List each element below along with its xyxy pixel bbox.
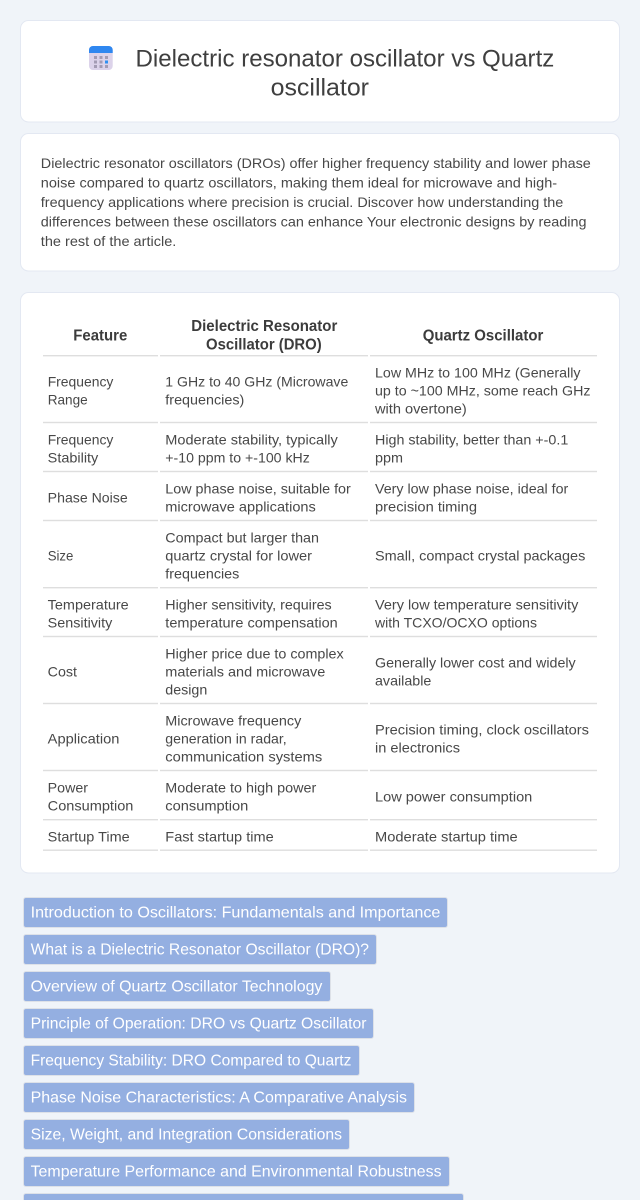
table row: temperature sensitivity: with TCXO/OCXO options [374, 614, 537, 630]
table row: size: quartz crystal for lower [165, 547, 312, 563]
topic button: quartz overview: Overview of Quartz Oscillator Technology [31, 979, 322, 996]
topic button: frequency stability: Frequency Stability: DRO Compared to Quartz [31, 1053, 351, 1070]
table row: startup time [43, 828, 597, 851]
table row: temperature sensitivity [43, 596, 597, 637]
table header [43, 318, 597, 356]
table row: frequency range: Range [48, 391, 88, 407]
table row: frequency range: Frequency [48, 373, 113, 389]
table row: application [43, 712, 597, 771]
panel: comparison table [20, 292, 620, 873]
table row: phase noise: Low phase noise, suitable for [165, 480, 351, 496]
title [136, 46, 554, 102]
table row: frequency range: 1 GHz to 40 GHz (Microwave [165, 373, 349, 389]
topic button: frequency stability [24, 1046, 360, 1076]
text block: introduction paragraph: the rest of the article. [41, 233, 176, 249]
table row: cost: design [165, 681, 207, 697]
table row: application: communication systems [165, 748, 322, 764]
table row: size: Small, compact crystal packages [375, 547, 585, 563]
table row: frequency stability [43, 432, 597, 472]
table row: cost: materials and microwave [165, 663, 326, 679]
table row: temperature sensitivity: Higher sensitivity, requires [165, 596, 332, 612]
table row: frequency stability: +-10 ppm to +-100 kHz [165, 450, 310, 466]
topic button: principle of operation [24, 1008, 374, 1038]
table header: Oscillator (DRO) [206, 336, 322, 354]
table row: application: in electronics [375, 739, 460, 755]
table row: cost: available [375, 673, 432, 689]
table row: startup time: Fast startup time [165, 828, 274, 844]
table row: power consumption: Power [48, 779, 88, 795]
table row: size: frequencies [165, 565, 239, 581]
topic button: introduction: Introduction to Oscillators: Fundamentals and Importance [31, 905, 440, 922]
table row: size: Compact but larger than [165, 529, 319, 545]
table row: frequency range [43, 364, 597, 423]
table row: power consumption: Low power consumption [375, 788, 532, 804]
topic button: phase noise [24, 1082, 414, 1112]
table row: frequency range: up to ~100 MHz, some reach GHz [375, 382, 590, 398]
table row: startup time: Moderate startup time [375, 828, 518, 844]
topic button: size and weight [24, 1120, 350, 1150]
table row: phase noise: Very low phase noise, ideal for [375, 480, 569, 496]
table row: frequency range: with overtone) [374, 400, 467, 416]
topic button: what is a DRO: What is a Dielectric Resonator Oscillator (DRO)? [31, 942, 369, 959]
table row: phase noise: Phase Noise [48, 489, 128, 505]
table row: power consumption [43, 779, 597, 820]
table row: phase noise: precision timing [375, 498, 477, 514]
table row: frequency stability: Moderate stability, typically [165, 432, 338, 448]
table header: Dielectric Resonator [191, 318, 337, 335]
table row: frequency stability: High stability, better than +-0.1 [375, 432, 569, 448]
table row: phase noise: microwave applications [165, 498, 316, 514]
table row: power consumption: consumption [165, 797, 248, 813]
table row: startup time: Startup Time [48, 828, 130, 844]
table row: temperature sensitivity: Very low temperature sensitivity [375, 596, 578, 612]
topic button: what is a DRO [24, 934, 376, 964]
topic button: phase noise: Phase Noise Characteristics: A Comparative Analysis [31, 1090, 407, 1107]
table row: size: Size [48, 547, 74, 563]
table header: Feature [73, 328, 127, 345]
topic button: temperature performance: Temperature Performance and Environmental Robustness [31, 1164, 442, 1181]
table row: frequency range: frequencies) [165, 391, 244, 407]
table row: temperature sensitivity: temperature compensation [165, 614, 338, 630]
table row: cost: Cost [48, 663, 77, 679]
title: oscillator [271, 74, 369, 102]
topic button: quartz overview [24, 972, 330, 1002]
table row: application: generation in radar, [165, 730, 287, 746]
table row: frequency range: Low MHz to 100 MHz (Generally [375, 364, 580, 380]
topic button: temperature performance [24, 1156, 450, 1186]
table row: temperature sensitivity: Temperature [48, 596, 129, 612]
icon: calendar [89, 46, 113, 70]
panel: introduction [20, 134, 620, 271]
topic button: principle of operation: Principle of Operation: DRO vs Quartz Oscillator [31, 1016, 367, 1033]
table row: phase noise [43, 480, 597, 521]
table row: application: Microwave frequency [165, 712, 301, 728]
topic button: introduction [24, 898, 448, 928]
table row: power consumption: Moderate to high power [165, 779, 317, 795]
table header: Quartz Oscillator [423, 328, 543, 345]
table row: power consumption: Consumption [48, 797, 133, 813]
table row: application: Application [48, 730, 119, 746]
text block: introduction paragraph: frequency applications where precision is crucial. Discover how understanding the [41, 194, 564, 210]
title: Dielectric resonator oscillator vs Quartz [136, 46, 554, 72]
text block: introduction paragraph: noise compared to quartz oscillators, making them ideal for microwave and high- [41, 174, 557, 190]
table row: size [43, 529, 597, 588]
panel: title card [20, 20, 620, 122]
table row: cost [43, 645, 597, 704]
topic button: size and weight: Size, Weight, and Integration Considerations [31, 1127, 342, 1144]
topic button: cut off at page edge [24, 1194, 464, 1200]
text block: introduction paragraph [41, 155, 591, 249]
table row: frequency stability: Stability [48, 450, 98, 466]
table row: cost: Higher price due to complex [165, 645, 344, 661]
table row: application: Precision timing, clock oscillators [375, 721, 589, 737]
topic link list [24, 898, 464, 1200]
text block: introduction paragraph: differences between these oscillators can enhance Your electronic designs by reading [41, 214, 587, 230]
table row: frequency stability: ppm [375, 450, 403, 466]
text block: introduction paragraph: Dielectric resonator oscillators (DROs) offer higher frequency stability and lower phase [41, 155, 591, 171]
table row: cost: Generally lower cost and widely [375, 655, 576, 671]
table row: temperature sensitivity: Sensitivity [48, 614, 112, 630]
table row: frequency stability: Frequency [48, 432, 113, 448]
